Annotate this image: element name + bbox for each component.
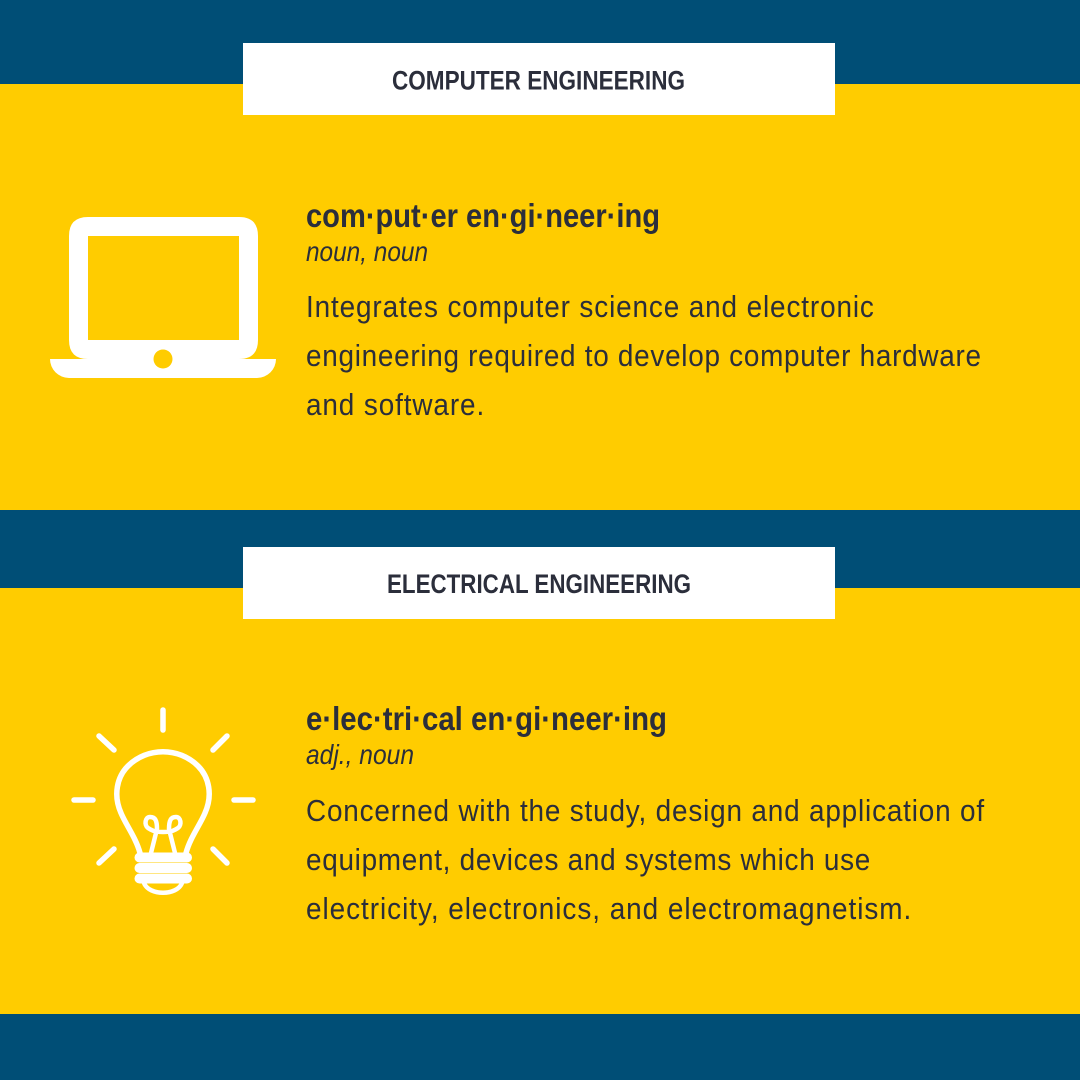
definition text: engineering required to develop computer hardware xyxy=(306,339,981,373)
heading: electrical engineering: ELECTRICAL ENGINEERING xyxy=(387,569,691,599)
dictionary headword: com·put·er en·gi·neer·ing xyxy=(306,197,660,234)
definition text xyxy=(306,794,985,926)
definition text: and software. xyxy=(306,388,484,422)
definition text: electricity, electronics, and electromagnetism. xyxy=(306,892,911,926)
icon: laptop xyxy=(50,217,276,378)
part of speech: adj., noun xyxy=(306,739,414,770)
heading: electrical engineering xyxy=(243,547,835,619)
part of speech: noun, noun xyxy=(306,236,428,267)
bottom navy band xyxy=(0,1014,1080,1080)
panel: electrical engineering xyxy=(74,547,985,926)
panel: computer engineering xyxy=(50,43,981,422)
middle navy band xyxy=(0,510,1080,588)
heading: computer engineering xyxy=(243,43,835,115)
heading: computer engineering: COMPUTER ENGINEERING xyxy=(392,66,685,96)
definition text xyxy=(306,290,981,422)
definition text: equipment, devices and systems which use xyxy=(306,843,870,877)
top navy band xyxy=(0,0,1080,84)
definition text: Integrates computer science and electronic xyxy=(306,290,874,324)
icon: light bulb xyxy=(74,710,253,893)
definition text: Concerned with the study, design and application of xyxy=(306,794,985,828)
dictionary headword: e·lec·tri·cal en·gi·neer·ing xyxy=(306,700,667,737)
